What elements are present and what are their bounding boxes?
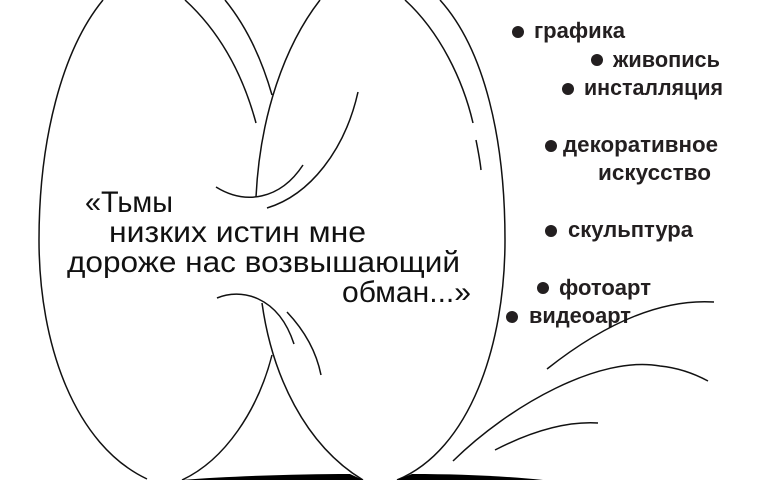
item: декоративное искусство [545,132,718,185]
item: видеоарт: видеоарт [529,303,631,328]
item: скульптура: скульптура [568,217,694,242]
right oval: right edge [397,0,505,480]
quote text: низких истин мне [109,216,366,249]
black ground shape: right part [397,474,543,480]
item: фотоарт: фотоарт [559,275,651,300]
spray arc: bottom [495,423,598,450]
quote text: «Тьмы [85,186,173,219]
fold arc: lower [217,294,294,344]
left oval: lower right edge [182,355,272,480]
right oval: upper right inner arc [405,0,473,123]
list of art forms [506,18,723,328]
left oval: outer edge [39,0,147,479]
spray arc: middle [453,364,708,461]
fold arc: upper [216,165,303,197]
spray arcs [453,302,714,461]
item: живопись: живопись [612,47,720,72]
right oval: lower left edge [262,303,363,480]
quote text [67,186,471,309]
left oval: second upper arc [225,0,272,95]
item: инсталляция: инсталляция [584,75,723,100]
item: графика: графика [534,18,626,43]
right oval: left edge [256,0,320,197]
left oval: upper right arc [185,0,256,123]
quote text: дороже нас возвышающий [67,246,460,279]
item: декоративное искусство: декоративное [563,132,718,157]
illustration: two overlapping ovals [39,0,543,480]
item: декоративное искусство: искусство [598,160,711,185]
right oval: short dash [476,140,481,170]
spray arc: top [547,302,714,369]
quote text: обман...» [342,276,471,309]
fold arc: upper outer [267,92,358,208]
fold arc: lower outer [287,312,321,375]
black ground shape: left part [182,474,363,480]
